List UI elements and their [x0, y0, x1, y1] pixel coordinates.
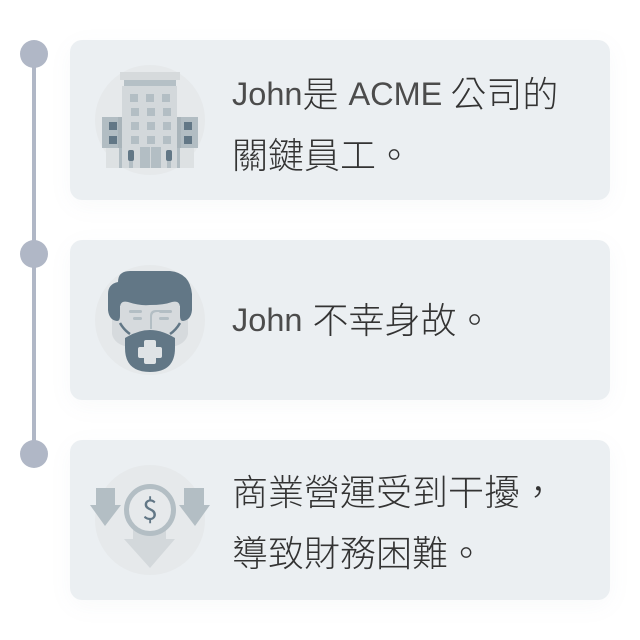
text: business disrupted: 商業營運受到干擾， [232, 464, 556, 516]
panel: John passed away [70, 240, 610, 400]
text: John is a key employee: John是 ACME 公司的 [232, 66, 558, 118]
timeline connector [20, 40, 48, 468]
text: business disrupted: 導致財務困難。 [232, 524, 484, 576]
text: John passed away: John 不幸身故。 [232, 292, 492, 344]
text: John is a key employee: 關鍵員工。 [232, 127, 412, 179]
panel: business disrupted [70, 440, 610, 600]
icon: office building [102, 72, 198, 168]
text: John is a key employee [232, 66, 558, 179]
timeline dot 2 [20, 240, 48, 268]
icon: dollar coin with falling arrows [90, 484, 210, 568]
timeline dot 3 [20, 440, 48, 468]
icon: man with medical mask [108, 271, 192, 372]
panel: John is a key employee [70, 40, 610, 200]
dollar sign: $ [142, 488, 158, 528]
text: business disrupted [232, 464, 556, 576]
timeline dot 1 [20, 40, 48, 68]
vertical line [32, 54, 36, 454]
